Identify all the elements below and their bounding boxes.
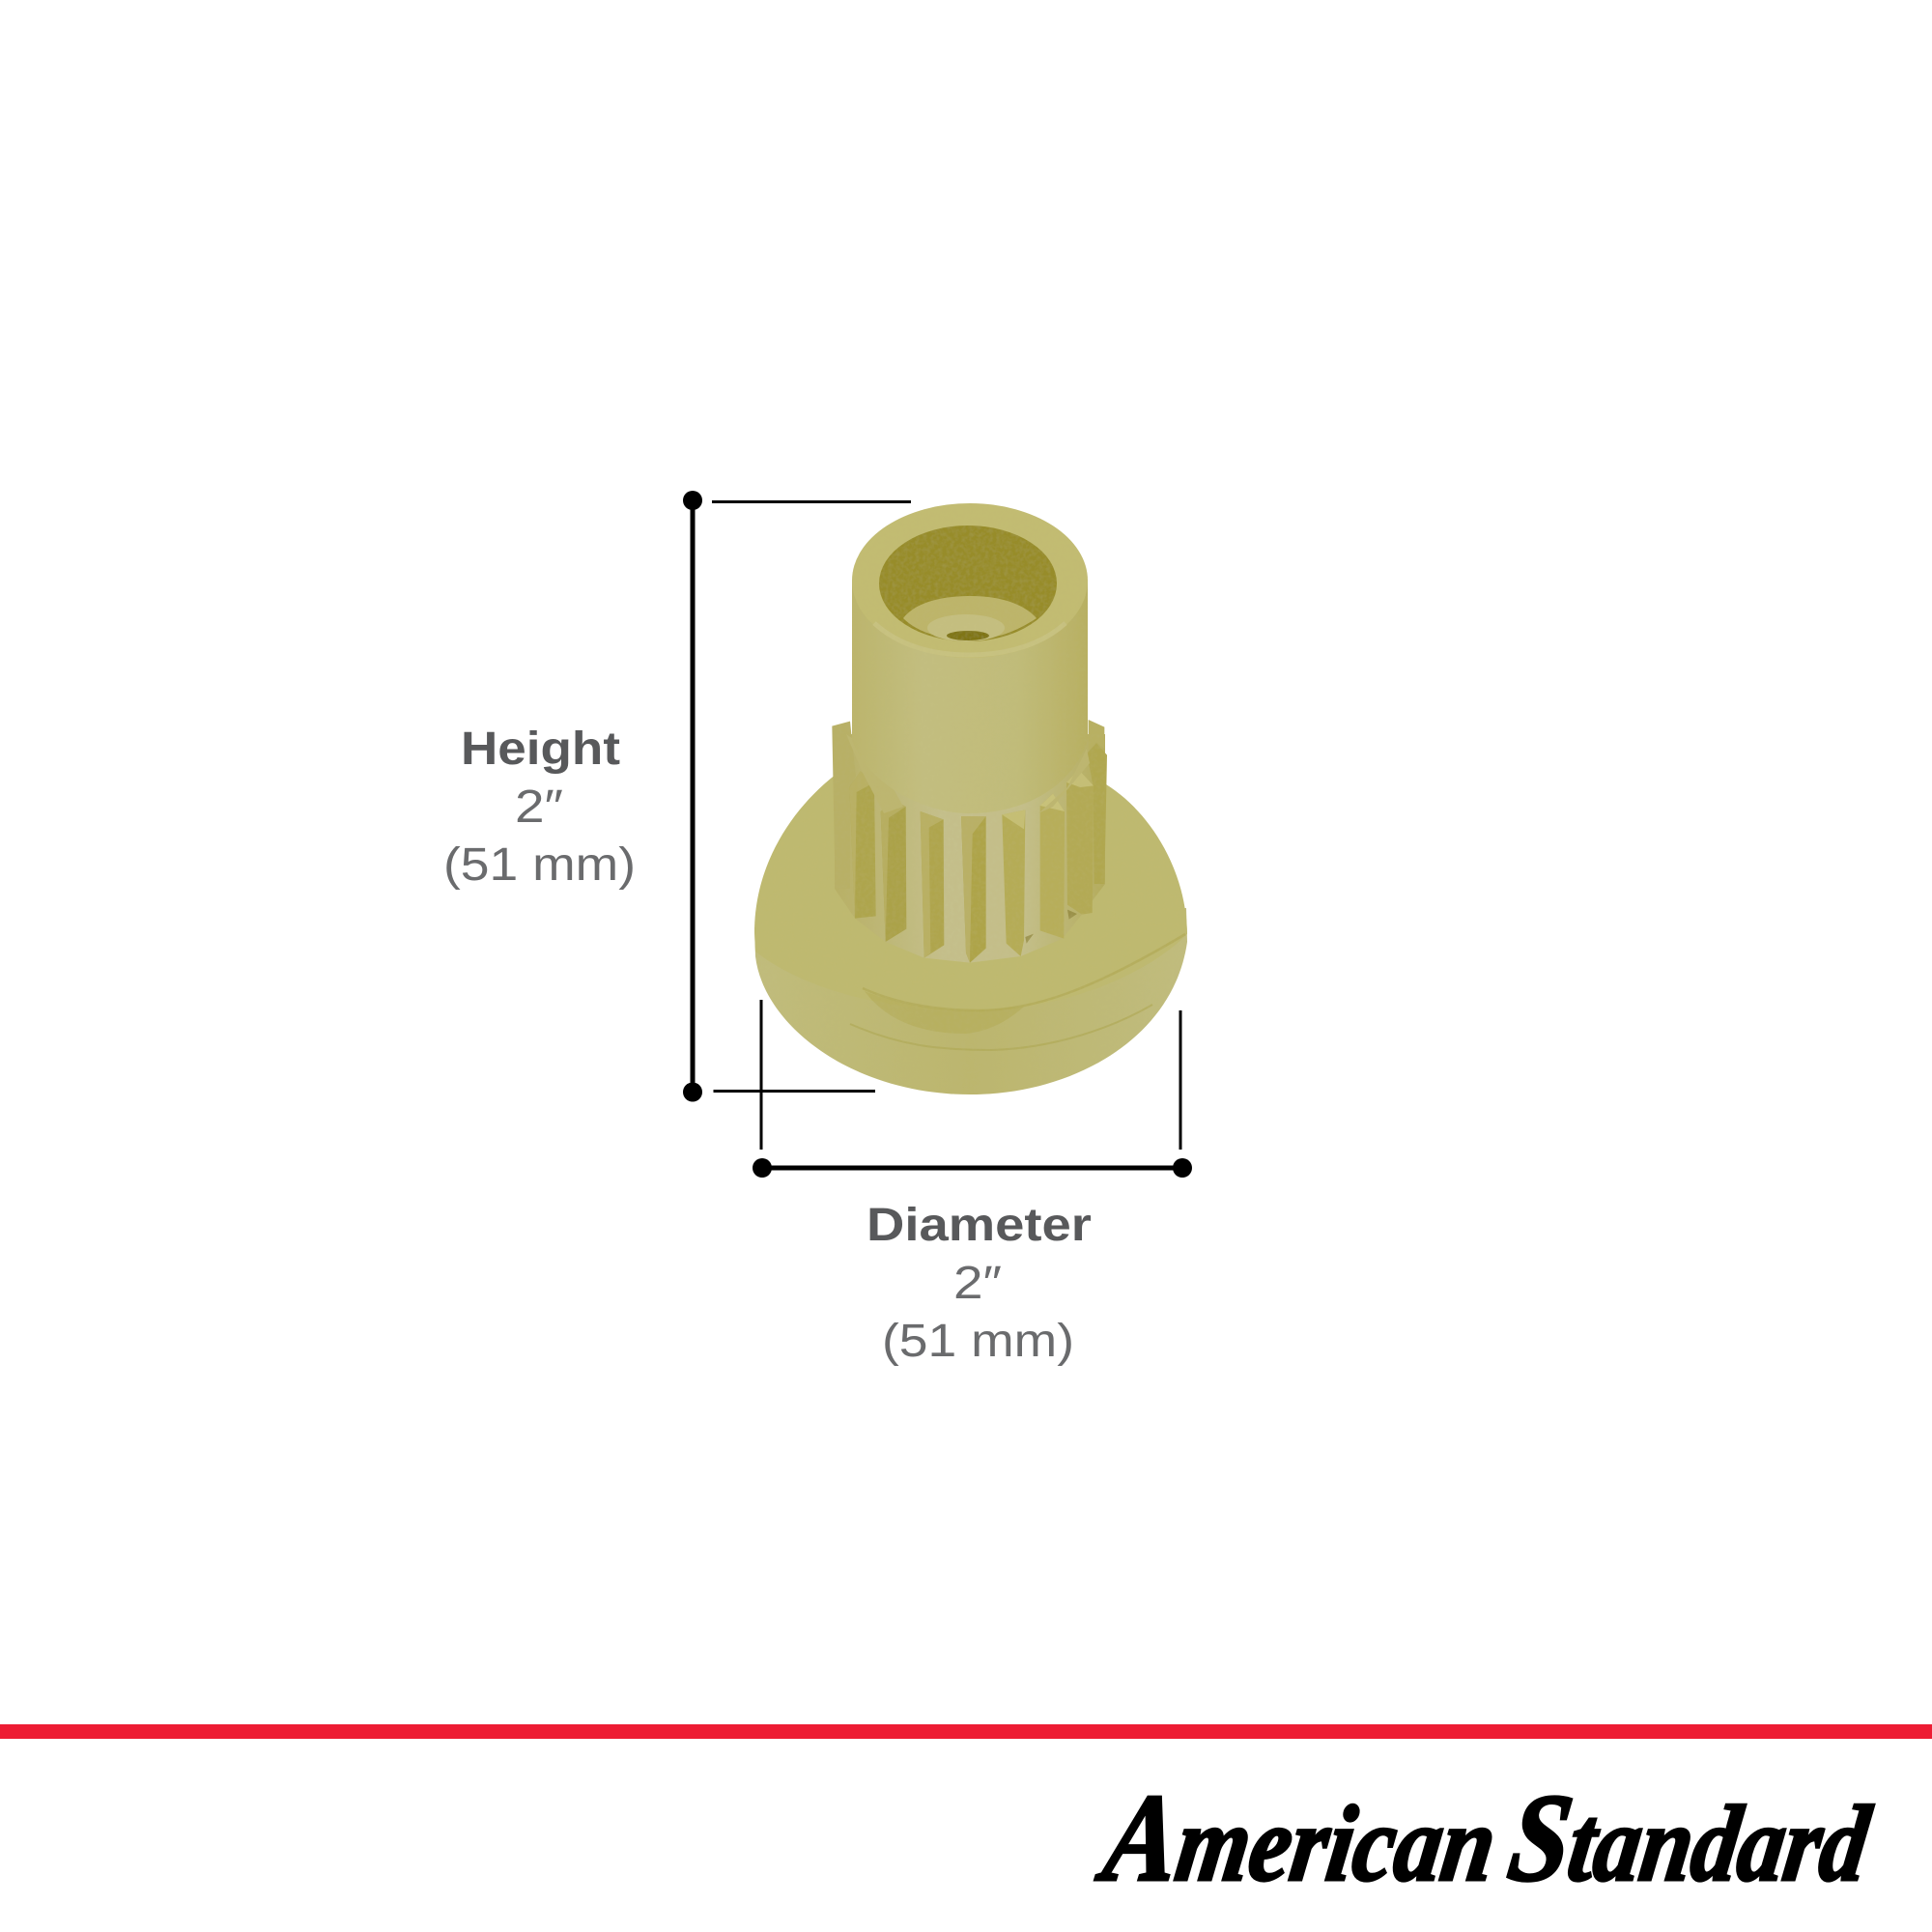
height millimetres: (51 mm): [443, 839, 636, 891]
height heading: Height: [461, 724, 620, 775]
diameter millimetres: (51 mm): [882, 1316, 1074, 1367]
diameter right endpoint: [1173, 1158, 1192, 1178]
tooth 1: [849, 771, 876, 919]
diameter label: [867, 1200, 1092, 1367]
height inches: 2″: [515, 781, 563, 833]
base flange top face: [754, 771, 1187, 1011]
gear back wall: [835, 734, 1105, 963]
back right tooth: [1087, 743, 1107, 884]
logo word Standard: Standard: [1501, 1770, 1880, 1908]
base flange lower groove: [850, 1005, 1152, 1050]
diameter axis line: [762, 1165, 1182, 1171]
base flange front band: [865, 991, 1024, 1034]
gear collar: [846, 734, 1090, 813]
brand logo: [1091, 1770, 1880, 1908]
bore inner lip: [927, 614, 1005, 641]
height top tick: [712, 500, 911, 503]
height bottom endpoint: [683, 1082, 702, 1101]
stem cylinder body: [852, 580, 1088, 813]
height axis line: [690, 500, 696, 1092]
diameter left endpoint: [753, 1158, 772, 1178]
bore center hole: [947, 631, 989, 640]
tooth 6: [1040, 794, 1065, 939]
red footer rule: [0, 1724, 1932, 1739]
diameter right tick: [1179, 1010, 1182, 1150]
base shadows: [1025, 910, 1077, 944]
logo word American: American: [1091, 1770, 1505, 1908]
gear teeth group: [832, 720, 1107, 963]
tooth 2: [881, 800, 906, 942]
tooth 4: [961, 816, 986, 963]
product photo: splined stem adapter: [754, 503, 1187, 1094]
height dimension marker: [683, 491, 911, 1101]
stem bore: [879, 526, 1057, 641]
base flange rim: [754, 908, 1187, 1094]
stem ring front highlight: [874, 623, 1065, 655]
diameter inches: 2″: [953, 1258, 1002, 1309]
diameter heading: Diameter: [867, 1200, 1092, 1251]
diameter left tick: [759, 1000, 763, 1150]
tooth 3: [921, 811, 944, 958]
bore inner step: [903, 596, 1037, 639]
height top endpoint: [683, 491, 702, 510]
stem top ring: [852, 503, 1088, 658]
height bottom tick: [713, 1090, 875, 1093]
base flange step edge: [863, 934, 1185, 1010]
back left tooth: [832, 722, 856, 889]
back right upper tooth: [1089, 720, 1104, 751]
tooth 7: [1066, 770, 1094, 915]
tooth 5: [1002, 810, 1025, 956]
diameter dimension marker: [753, 1000, 1192, 1178]
height label: [443, 724, 636, 891]
